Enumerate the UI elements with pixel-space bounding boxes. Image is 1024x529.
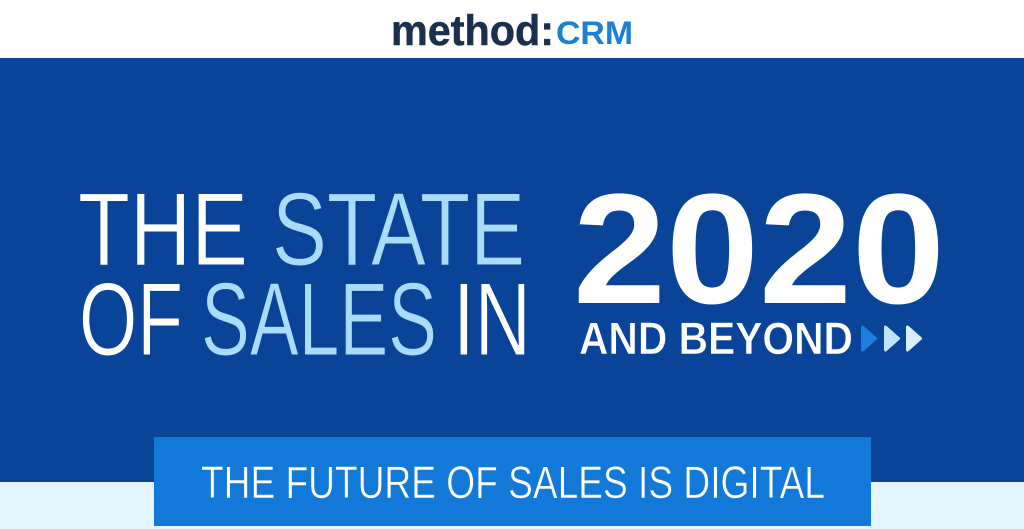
title: The State of Sales in <box>78 172 531 378</box>
banner: the future of sales is digital <box>154 437 871 526</box>
logo: method:CRM: CRM <box>556 15 633 51</box>
icon: triple arrows <box>862 327 920 350</box>
title: The State of Sales in: IN <box>453 262 531 378</box>
banner: the future of sales is digital: THE FUTURE OF SALES IS DIGITAL <box>201 457 825 508</box>
subtitle: and beyond: AND BEYOND <box>579 313 853 364</box>
pale lower band <box>0 482 1024 529</box>
title: The State of Sales in: OF <box>79 262 183 378</box>
logo: method:CRM: method: <box>391 7 554 55</box>
year: 2020: 2020 <box>573 162 945 337</box>
title: The State of Sales in: SALES <box>201 262 437 378</box>
top white logo bar <box>0 0 1024 58</box>
title: The State of Sales in: STATE <box>272 172 525 288</box>
title: The State of Sales in: THE <box>78 172 248 288</box>
